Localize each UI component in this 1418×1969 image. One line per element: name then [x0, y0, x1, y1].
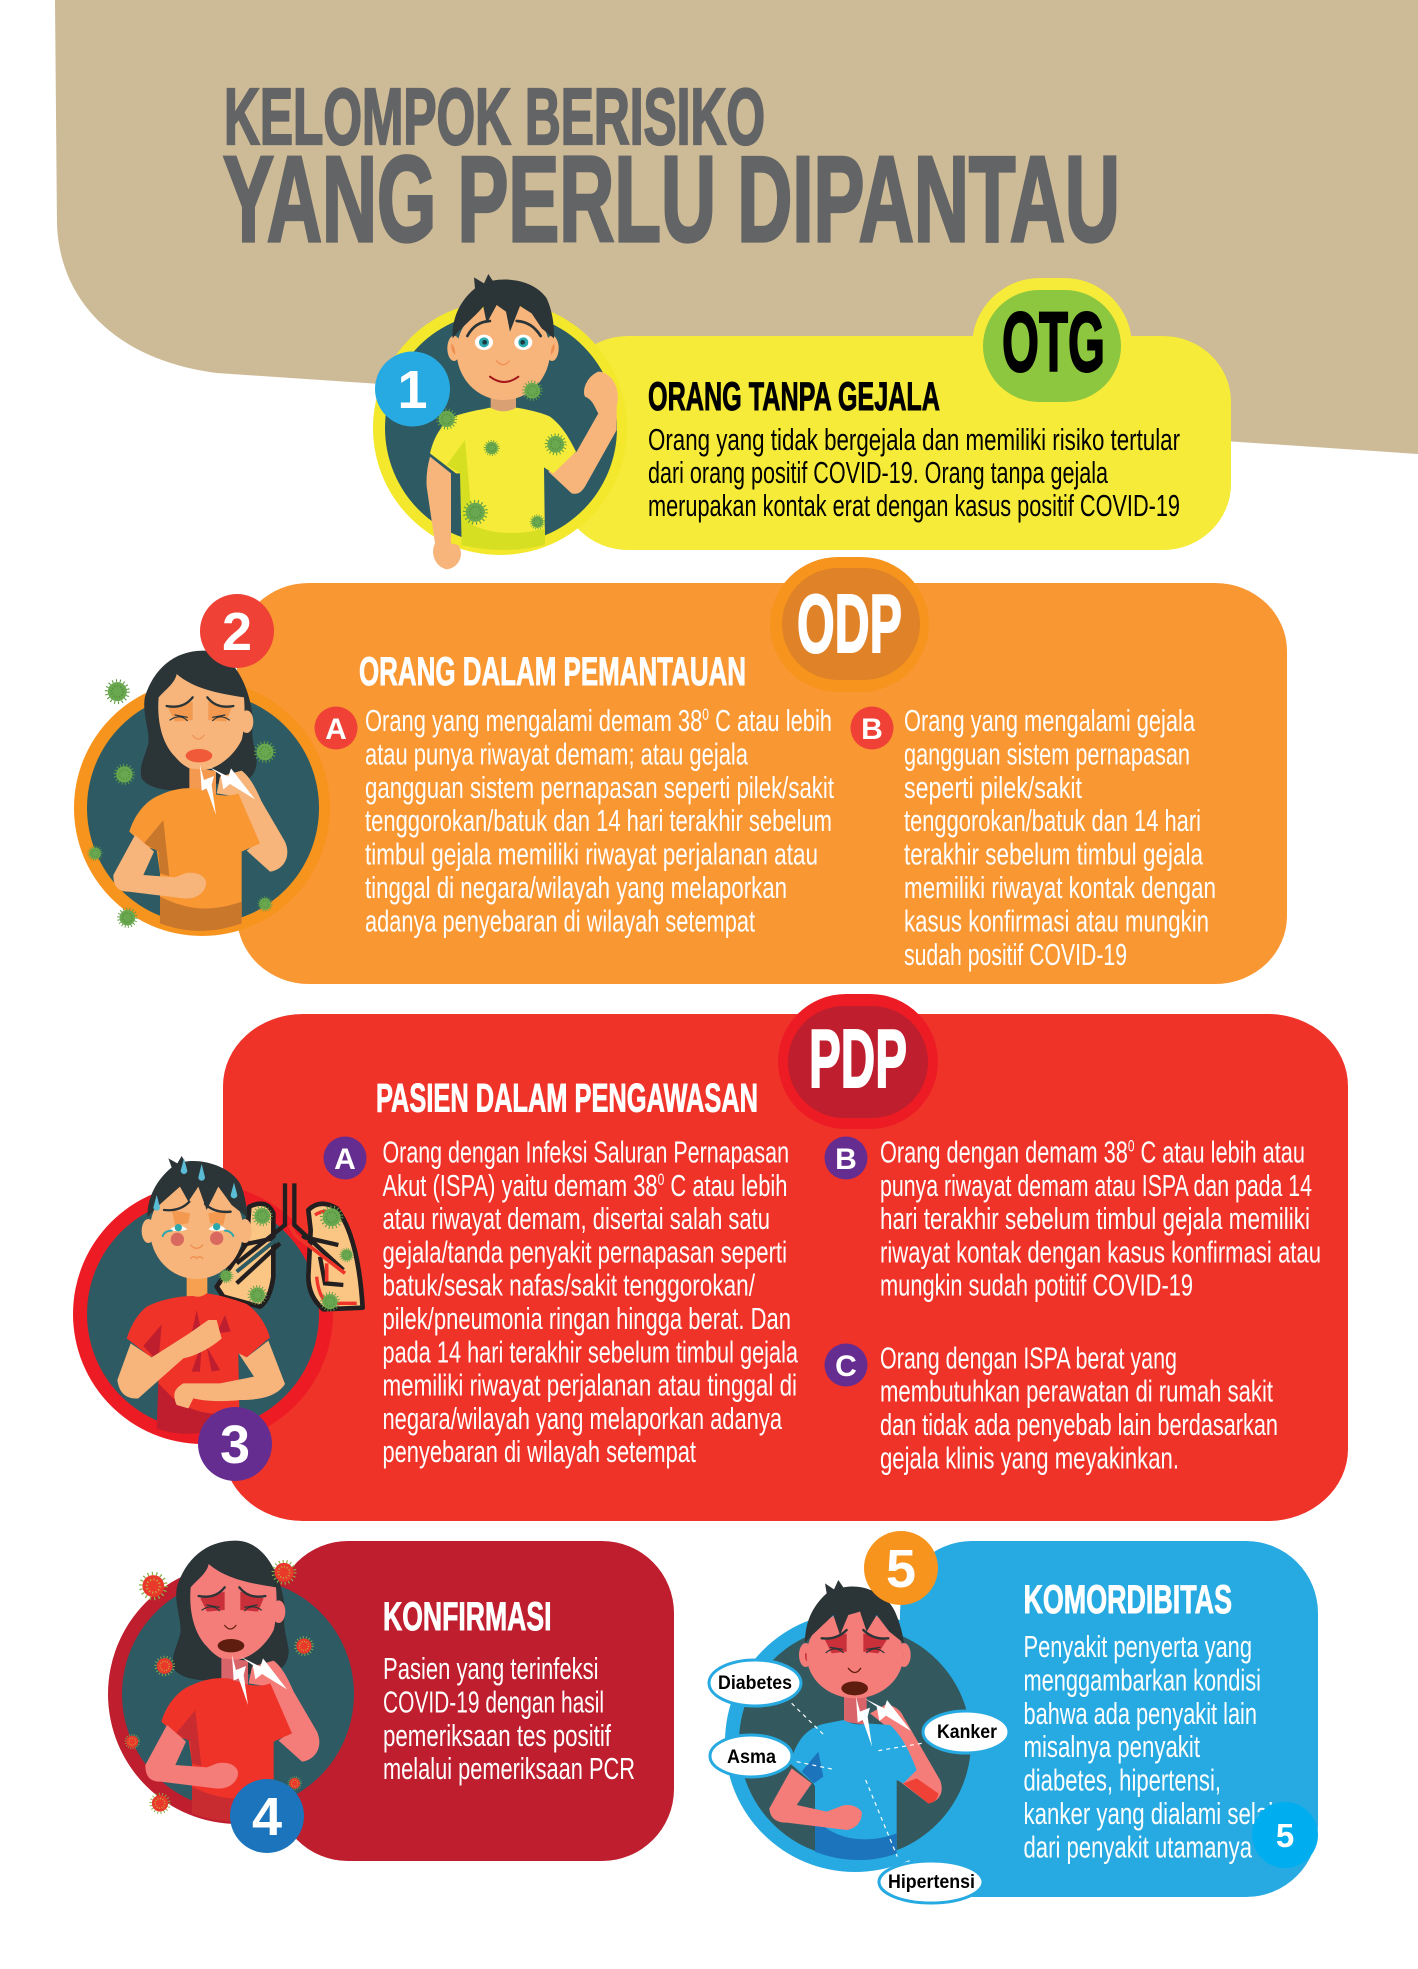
text block: PDP A: batuk/sesak nafas/sakit tenggorokan/	[382, 1268, 755, 1303]
icon: coughing woman	[74, 651, 330, 936]
badge B	[850, 706, 894, 750]
text block: PDP B: Orang dengan demam 38	[880, 1134, 1233, 1170]
badge C	[824, 1344, 868, 1386]
text block: PDP A: C atau lebih	[664, 1168, 788, 1203]
text block: ODP B	[904, 703, 1216, 972]
heading: Orang Tanpa Gejala: ORANG TANPA GEJALA	[648, 375, 940, 419]
text block: Komordibitas description: menggambarkan kondisi	[1024, 1662, 1261, 1697]
number badge 2: 2	[222, 602, 252, 662]
text block: Konfirmasi description	[383, 1651, 635, 1786]
text block: PDP B	[880, 1134, 1321, 1303]
badge A	[324, 1136, 366, 1180]
OTG pill: OTG	[1002, 295, 1105, 389]
badge A: A	[334, 1143, 356, 1176]
number badge 2	[200, 594, 274, 668]
number badge 5 orange	[864, 1531, 938, 1605]
heading: Konfirmasi: KONFIRMASI	[383, 1595, 552, 1639]
text block: ODP B: sudah positif COVID-19	[904, 937, 1127, 972]
text block: PDP C	[880, 1340, 1278, 1475]
text block: Komordibitas description	[1024, 1629, 1286, 1864]
text block: ODP B: terakhir sebelum timbul gejala	[904, 837, 1204, 872]
text block: ODP B: kasus konfirmasi atau mungkin	[904, 903, 1209, 938]
text block: Komordibitas description: bahwa ada penyakit lain	[1024, 1696, 1257, 1731]
badge B: B	[835, 1143, 857, 1176]
number badge 4: 4	[252, 1787, 282, 1847]
text block: PDP A: gejala/tanda penyakit pernapasan seperti	[382, 1234, 787, 1269]
text block: Komordibitas description: dari penyakit utamanya	[1024, 1829, 1253, 1864]
ODP pill	[770, 557, 929, 692]
ODP pill: ODP	[797, 577, 902, 670]
beige header background	[55, 0, 1418, 454]
text block: OTG description	[648, 422, 1180, 523]
number badge 3: 3	[220, 1415, 250, 1475]
badge A: A	[325, 713, 347, 746]
PDP pill: PDP	[809, 1012, 907, 1105]
text block: OTG description: merupakan kontak erat dengan kasus positif COVID-19	[648, 488, 1180, 523]
text block: ODP A	[365, 703, 834, 938]
number badge 3	[198, 1407, 272, 1481]
badge B: B	[861, 713, 883, 746]
badge C: C	[835, 1350, 857, 1383]
text block: ODP A: Orang yang mengalami demam 38	[365, 703, 842, 738]
text block: PDP B: C atau lebih atau	[1135, 1134, 1305, 1170]
text block: OTG description: Orang yang tidak bergejala dan memiliki risiko tertular	[648, 422, 1180, 457]
label: Kanker	[923, 1711, 1009, 1753]
text block: ODP A: adanya penyebaran di wilayah setempat	[365, 903, 755, 938]
text block: ODP A: gangguan sistem pernapasan seperti pilek/sakit	[365, 770, 834, 805]
number badge 1	[375, 352, 450, 426]
text block: Komordibitas description: misalnya penyakit	[1024, 1729, 1200, 1764]
text block: ODP B: seperti pilek/sakit	[904, 770, 1082, 805]
label: Hipertensi: Hipertensi	[888, 1872, 975, 1893]
label: Diabetes	[709, 1660, 801, 1706]
text block: PDP B: mungkin sudah potitif COVID-19	[880, 1268, 1193, 1303]
text block: PDP A: memiliki riwayat perjalanan atau tinggal di	[382, 1368, 797, 1403]
text block: PDP A: pilek/pneumonia ringan hingga berat. Dan	[382, 1301, 791, 1336]
text block: ODP A: timbul gejala memiliki riwayat perjalanan atau	[365, 837, 818, 872]
panel: Konfirmasi	[108, 1541, 674, 1861]
title	[223, 72, 1120, 267]
label: Diabetes: Diabetes	[718, 1673, 792, 1694]
text block: Komordibitas description: Penyakit penyerta yang	[1024, 1629, 1252, 1664]
text block: PDP A: pada 14 hari terakhir sebelum timbul gejala	[382, 1334, 799, 1369]
OTG pill	[972, 278, 1132, 415]
text block: Konfirmasi description: COVID-19 dengan hasil	[383, 1684, 604, 1719]
panel: Komordibitas	[709, 1531, 1318, 1903]
number badge 1: 1	[397, 360, 428, 420]
number badge 5 orange: 5	[886, 1539, 916, 1599]
label: Hipertensi	[879, 1861, 983, 1903]
text block: PDP A: 0	[658, 1170, 664, 1189]
label: Kanker: Kanker	[937, 1722, 998, 1743]
text block: PDP A: penyebaran di wilayah setempat	[382, 1434, 696, 1469]
panel: PDP	[73, 994, 1348, 1521]
text block: Konfirmasi description: Pasien yang terinfeksi	[383, 1651, 598, 1686]
small cyan number badge 5	[1252, 1802, 1318, 1868]
small cyan number badge 5: 5	[1276, 1817, 1294, 1854]
text block: ODP B: tenggorokan/batuk dan 14 hari	[904, 803, 1201, 838]
text block: Komordibitas description: diabetes, hipertensi,	[1024, 1763, 1221, 1798]
text block: PDP C: membutuhkan perawatan di rumah sakit	[880, 1374, 1273, 1409]
panel: ODP	[74, 557, 1287, 984]
text block: PDP A: Akut (ISPA) yaitu demam 38	[382, 1168, 771, 1203]
badge A	[314, 706, 358, 750]
label: Asma	[710, 1735, 792, 1777]
text block: ODP A: tinggal di negara/wilayah yang melaporkan	[365, 870, 787, 905]
icon: infected woman	[108, 1541, 368, 1824]
text block: Konfirmasi description: melalui pemeriksaan PCR	[383, 1751, 635, 1786]
text block: ODP A: C atau lebih	[709, 703, 832, 738]
text block: OTG description: dari orang positif COVID-19. Orang tanpa gejala	[648, 455, 1109, 490]
title: KELOMPOK BERISIKO	[224, 72, 765, 161]
text block: Komordibitas description: kanker yang dialami selain	[1024, 1796, 1286, 1831]
text block: ODP A: atau punya riwayat demam; atau gejala	[365, 736, 749, 771]
badge B	[824, 1136, 868, 1180]
icon: sick boy with comorbidities	[725, 1580, 985, 1872]
icon: healthy-looking boy with virus	[373, 274, 627, 569]
text block: ODP B: gangguan sistem pernapasan	[904, 736, 1190, 771]
text block: PDP A: atau riwayat demam, disertai salah satu	[382, 1201, 770, 1236]
text block: ODP A: tenggorokan/batuk dan 14 hari terakhir sebelum	[365, 803, 832, 838]
number badge 4	[230, 1779, 304, 1853]
heading: Komordibitas: KOMORDIBITAS	[1024, 1578, 1232, 1622]
text block: PDP A	[382, 1134, 799, 1469]
panel: OTG	[373, 274, 1231, 569]
text block: PDP A: negara/wilayah yang melaporkan adanya	[382, 1401, 783, 1436]
text block: PDP C: gejala klinis yang meyakinkan.	[880, 1440, 1179, 1475]
label: Asma: Asma	[727, 1747, 776, 1768]
heading: Orang Dalam Pemantauan: ORANG DALAM PEMANTAUAN	[359, 650, 746, 694]
icon: sick boy with lungs	[73, 1156, 363, 1444]
PDP pill	[778, 994, 938, 1129]
text block: PDP C: Orang dengan ISPA berat yang	[880, 1340, 1177, 1375]
heading: Pasien Dalam Pengawasan: PASIEN DALAM PENGAWASAN	[376, 1076, 758, 1120]
text block: Konfirmasi description: pemeriksaan tes positif	[383, 1718, 611, 1753]
text block: ODP B: Orang yang mengalami gejala	[904, 703, 1196, 738]
text block: PDP B: 0	[1128, 1136, 1135, 1156]
text block: ODP B: memiliki riwayat kontak dengan	[904, 870, 1216, 905]
text block: PDP A: Orang dengan Infeksi Saluran Pernapasan	[382, 1134, 789, 1170]
text block: ODP A: 0	[702, 705, 709, 724]
